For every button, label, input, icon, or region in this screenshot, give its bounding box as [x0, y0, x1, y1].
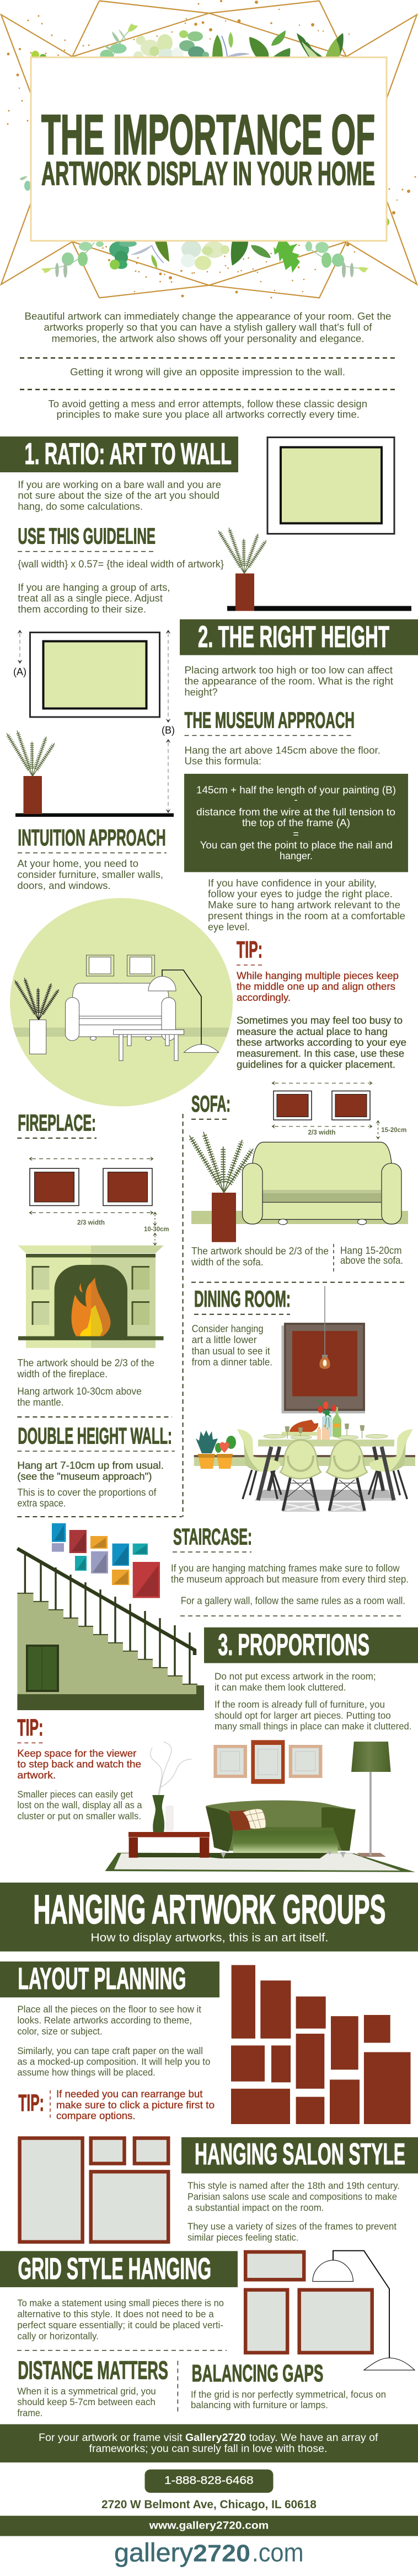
diagram: frames above fireplace: 10-30cm: [144, 1226, 169, 1233]
introduction text: [20, 311, 396, 420]
text: layout guidance: Place all the pieces on the floor to see how it: [17, 2004, 201, 2015]
tip: multiple pieces: measurement. In this case, use these: [237, 1048, 404, 1059]
text: grid guidance: To make a statement using small pieces there is no: [17, 2298, 224, 2309]
text: group of arts: treat all as a single piece. Adjust: [18, 593, 163, 604]
illustration: gallery wall frames: [52, 1523, 160, 1598]
illustration: measured art height diagram: [7, 633, 175, 817]
banner: 1. ratio: [0, 436, 238, 472]
text: group of arts: [18, 582, 170, 615]
formula text: {wall width} x 0.57= {the ideal width of artwork}: [18, 559, 224, 570]
introduction text: Getting it wrong will give an opposite impression to the wall.: [70, 367, 345, 378]
text: hang the art: Use this formula:: [184, 756, 261, 767]
text: layout guidance: as a mocked-up composition. It will help you to: [17, 2056, 210, 2067]
illustration: grid frames with lamp: [245, 2251, 415, 2370]
panel: balancing gaps: BALANCING GAPS: [192, 2360, 323, 2387]
text: fireplace guidance: Hang artwork 10-30cm above: [17, 1386, 142, 1397]
tip: step back: TIP:: [17, 1715, 43, 1741]
illustration: room in green circle: [10, 898, 233, 1107]
text: salon guidance: This style is named after the 18th and 19th century.: [187, 2180, 400, 2191]
footer call to action: [0, 2424, 418, 2462]
section 2: the right height: [17, 619, 418, 933]
floor lamp: [351, 1742, 391, 1857]
illustration: fireplace with flames: [18, 1246, 164, 1348]
text: sofa width: The artwork should be 2/3 of the: [191, 1246, 329, 1257]
diagram: frames above sofa: 15-20cm: [381, 1127, 406, 1134]
heading: sofa: SOFA:: [191, 1091, 231, 1117]
text: layout guidance: Similarly, you can tape craft paper on the wall: [17, 2045, 203, 2056]
website banner: [0, 2516, 418, 2536]
foliage above the frame: [31, 23, 344, 61]
tip: step back: cluster or put on smaller walls.: [17, 1810, 141, 1821]
heading: sofa: [191, 1091, 231, 1119]
phone number: [144, 2470, 274, 2493]
text: proportions guidance: many small things in place can make it cluttered.: [215, 1721, 411, 1732]
text: double height guidance: Hang art 7-10cm up from usual.: [17, 1460, 164, 1471]
illustration: living room with sofa and frames: [105, 1740, 415, 1872]
tip: multiple pieces: these artworks according to your eye: [237, 1037, 406, 1048]
text: sofa width: width of the sofa.: [191, 1257, 264, 1268]
text: fireplace guidance: width of the fireplace.: [17, 1368, 108, 1379]
text: sofa height: Hang 15-20cm: [340, 1245, 401, 1256]
text: grid guidance: perfect square essentially; it could be placed verti-: [17, 2320, 223, 2331]
address: 2720 W Belmont Ave, Chicago, IL 60618: [101, 2498, 317, 2511]
title: [41, 104, 375, 192]
tip: step back: Smaller pieces can easily get: [17, 1789, 133, 1800]
introduction text: principles to make sure you place all artworks correctly every time.: [56, 409, 360, 420]
text: proportions guidance: If the room is already full of furniture, you: [215, 1699, 385, 1710]
subheading: intuition approach: INTUITION APPROACH: [18, 824, 166, 850]
text: confidence: [208, 878, 405, 933]
panel: distance matters: When it is a symmetrical grid, you: [17, 2385, 156, 2396]
banner: hanging artwork groups: How to display artworks, this is an art itself.: [90, 1932, 329, 1944]
text: salon guidance: Parisian salons use scale and compositions to make: [187, 2191, 397, 2202]
panel: distance matters: should keep 5-7cm between each: [17, 2396, 156, 2407]
text: proportions guidance: Do not put excess artwork in the room;: [215, 1671, 376, 1682]
panel: distance matters: [17, 2356, 168, 2418]
diagram: frames above fireplace: 2/3 width: [77, 1220, 105, 1226]
text: dining guidance: than usual to see it: [192, 1346, 270, 1357]
text: at your home: consider furniture, smaller walls,: [17, 869, 163, 880]
tip: multiple pieces: [237, 937, 406, 1070]
panel: staircase: [17, 1523, 409, 1710]
tip: step back: Keep space for the viewer: [17, 1748, 136, 1759]
formula box: hanger.: [280, 850, 313, 861]
illustration: salon frames: [20, 2138, 168, 2242]
illustration: stairs with door: [17, 1549, 204, 1710]
text: confidence: present things in the room at a comfortable: [208, 910, 405, 921]
text: group of arts: If you are hanging a group of arts,: [18, 582, 170, 593]
title frame: [31, 57, 387, 241]
heading: staircase: STAIRCASE:: [173, 1524, 252, 1550]
panel: balancing gaps: [191, 2360, 386, 2411]
gold dots: [7, 0, 416, 299]
tip: multiple pieces: While hanging multiple pieces keep: [237, 970, 399, 981]
text: bare wall: If you are working on a bare wall and you are: [18, 479, 221, 491]
text: grid guidance: cally or horizontally.: [17, 2331, 99, 2342]
formula box: -: [294, 794, 298, 805]
gold geometric lines: [1, 1, 417, 298]
text: double height guidance: This is to cover the proportions of: [17, 1487, 157, 1498]
text: double height guidance: extra space.: [17, 1498, 66, 1509]
introduction text: memories, the artwork also shows off your personality and elegance.: [52, 333, 364, 344]
text: bare wall: [18, 479, 221, 512]
text: staircase guidance: For a gallery wall, follow the same rules as a room wall.: [181, 1596, 405, 1607]
text: bare wall: hang, do some calculations.: [18, 501, 143, 512]
illustration: measured art height diagram: (A): [13, 666, 26, 677]
panel: balancing gaps: If the grid is nor perfectly symmetrical, focus on: [191, 2389, 386, 2400]
text: placing artwork: Placing artwork too high or too low can affect: [184, 665, 393, 676]
text: layout guidance: assume how things will be placed.: [17, 2067, 156, 2078]
formula box: You can get the point to place the nail and: [200, 840, 393, 851]
text: sofa height: [340, 1245, 403, 1266]
illustration: framed art on wall with plant: [218, 438, 411, 611]
text: at your home: At your home, you need to: [17, 858, 138, 869]
tip: multiple pieces: guidelines for a quicker placement.: [237, 1059, 395, 1070]
text: double height guidance: (see the "museum approach"): [17, 1471, 152, 1482]
formula box: [184, 774, 408, 872]
foliage below the frame: [20, 176, 389, 278]
diagram: frames above sofa: [274, 1083, 406, 1136]
introduction text: Beautiful artwork can immediately change the appearance of your room. Get the: [24, 311, 391, 322]
text: hang the art: [184, 745, 381, 767]
text: staircase guidance: If you are hanging matching frames make sure to follow: [171, 1563, 400, 1574]
coffee table and vase: [128, 1742, 210, 1858]
panel: balancing gaps: balancing with furniture or lamps.: [191, 2400, 328, 2411]
text: confidence: eye level.: [208, 921, 250, 933]
text: at your home: [17, 858, 163, 891]
panel: distance matters: DISTANCE MATTERS: [18, 2356, 168, 2385]
text: proportions guidance: it can make them look cluttered.: [215, 1682, 346, 1693]
banner: grid style: [0, 2251, 238, 2287]
section 3: proportions: [17, 1627, 418, 1872]
panel: hanging salon style: [20, 2137, 418, 2243]
banner: 1. ratio: 1. RATIO: ART TO WALL: [24, 436, 232, 471]
text: placing artwork: [184, 665, 393, 698]
tip: multiple pieces: TIP:: [237, 937, 262, 963]
text: layout guidance: looks. Relate artworks according to theme,: [17, 2014, 192, 2025]
text: fireplace guidance: The artwork should be 2/3 of the: [17, 1357, 154, 1368]
tip: rearrange: compare options.: [56, 2110, 136, 2121]
text: placing artwork: the appearance of the room. What is the right: [184, 676, 393, 687]
introduction text: To avoid getting a mess and error attempts, follow these classic design: [49, 398, 367, 409]
text: placing artwork: height?: [184, 687, 217, 698]
text: salon guidance: a substantial impact on the room.: [187, 2202, 324, 2213]
formula box: the top of the frame (A): [242, 817, 350, 828]
logo: gallery2720.com: gallery: [114, 2538, 194, 2567]
tip: step back: lost on the wall, display all as a: [17, 1799, 142, 1810]
text: dining guidance: art a little lower: [192, 1334, 257, 1345]
text: fireplace guidance: the mantle.: [17, 1397, 63, 1408]
text: group of arts: them according to their size.: [18, 604, 146, 615]
text: staircase guidance: [171, 1563, 409, 1616]
text: layout guidance: color, size or subject.: [17, 2026, 103, 2037]
text: grid guidance: [17, 2298, 224, 2342]
text: dining guidance: from a dinner table.: [192, 1356, 272, 1367]
heading: dining room: DINING ROOM:: [194, 1286, 291, 1312]
frames on wall: [213, 1740, 322, 1784]
panel: distance matters: frame.: [17, 2407, 42, 2418]
tip: multiple pieces: accordingly.: [237, 992, 291, 1003]
subheading: use this guideline: USE THIS GUIDELINE: [18, 524, 156, 549]
tip: multiple pieces: Sometimes you may feel too busy to: [237, 1015, 403, 1026]
text: grid guidance: alternative to this style. It does not need to be a: [17, 2309, 214, 2320]
website banner: www.gallery2720.com: [149, 2520, 269, 2531]
panel: dining room: [192, 1286, 415, 1512]
text: double height guidance: [17, 1460, 164, 1509]
logo: gallery2720.com: .com: [252, 2538, 304, 2567]
rug: [105, 1853, 415, 1872]
formula box: 145cm + half the length of your painting (B): [196, 785, 396, 796]
introduction text: artworks properly so that you can have a stylish gallery wall that's full of: [44, 322, 373, 333]
text: confidence: follow your eyes to judge the right place.: [208, 888, 393, 899]
tip: rearrange: If needed you can rearrange but: [56, 2089, 202, 2100]
text: dining guidance: [192, 1323, 272, 1367]
text: salon guidance: similar pieces feeling static.: [187, 2232, 298, 2243]
illustration: measured art height diagram: (B): [162, 725, 175, 736]
text: sofa height: above the sofa.: [340, 1255, 403, 1266]
formula box: =: [293, 828, 299, 839]
heading: fireplace: FIREPLACE:: [18, 1110, 96, 1136]
logo: gallery2720.com: [114, 2538, 304, 2567]
text: proportions guidance: [215, 1671, 411, 1732]
tip: rearrange: [18, 2089, 215, 2121]
heading: double height wall: DOUBLE HEIGHT WALL:: [18, 1422, 172, 1448]
text: fireplace guidance: [17, 1357, 154, 1408]
panel: sofa: [189, 1083, 408, 1271]
text: sofa width: [191, 1246, 329, 1268]
panel: fireplace: [17, 1110, 169, 1408]
tip: multiple pieces: measure the actual place to hang: [237, 1026, 388, 1037]
logo: gallery2720.com: 2720: [193, 2540, 250, 2567]
tip: step back: to step back and watch the: [17, 1759, 141, 1770]
icon: potted plants: [196, 1430, 236, 1469]
header illustration: gold geometric frame and foliage: [1, 0, 417, 299]
banner: layout planning: [0, 1961, 219, 1997]
tip: rearrange: make sure to click a picture first to: [56, 2100, 215, 2111]
illustration: dining room art, table and chairs: [194, 1286, 415, 1512]
text: dining guidance: Consider hanging: [192, 1323, 264, 1334]
text: hang the art: Hang the art above 145cm above the floor.: [184, 745, 381, 756]
text: salon guidance: [187, 2180, 400, 2243]
diagram: frames above fireplace: [30, 1158, 169, 1243]
illustration: paper layout on wall: [231, 1965, 410, 2124]
footer call to action: For your artwork or frame visit Gallery2720 today. We have an array of: [39, 2432, 378, 2444]
text: confidence: Make sure to hang artwork relevant to the: [208, 899, 400, 910]
text: confidence: If you have confidence in your ability,: [208, 878, 377, 889]
phone number: 1-888-828-6468: [164, 2475, 254, 2487]
text: salon guidance: They use a variety of sizes of the frames to prevent: [187, 2221, 396, 2232]
tip: multiple pieces: the middle one up and align others: [237, 981, 395, 992]
text: layout guidance: [17, 2004, 210, 2078]
banner: hanging artwork groups: [0, 1883, 418, 1952]
section 1: ratio art to wall: [0, 436, 411, 615]
tip: step back: artwork.: [17, 1770, 56, 1781]
panel: double height wall: [17, 1422, 175, 1509]
tip: rearrange: TIP:: [18, 2090, 44, 2116]
banner: layout planning: LAYOUT PLANNING: [18, 1961, 186, 1996]
diagram: frames above sofa: 2/3 width: [308, 1129, 335, 1136]
panel: layout planning: [0, 1961, 410, 2124]
text: staircase guidance: the museum approach but measure from every third step.: [171, 1573, 409, 1585]
text: proportions guidance: should opt for larger art pieces. Putting too: [215, 1710, 391, 1721]
formula box: distance from the wire at the full tension to: [196, 807, 395, 818]
banner: grid style: GRID STYLE HANGING: [18, 2251, 211, 2286]
footer call to action: frameworks; you can surely fall in love with those.: [89, 2443, 328, 2455]
tip: step back: [17, 1715, 142, 1821]
text: at your home: doors, and windows.: [17, 880, 111, 891]
panel: grid style hanging: [0, 2251, 415, 2370]
text: bare wall: not sure about the size of the art you should: [18, 490, 219, 501]
illustration: sofa with plant: [189, 1132, 408, 1242]
green sofa: [206, 1801, 356, 1858]
